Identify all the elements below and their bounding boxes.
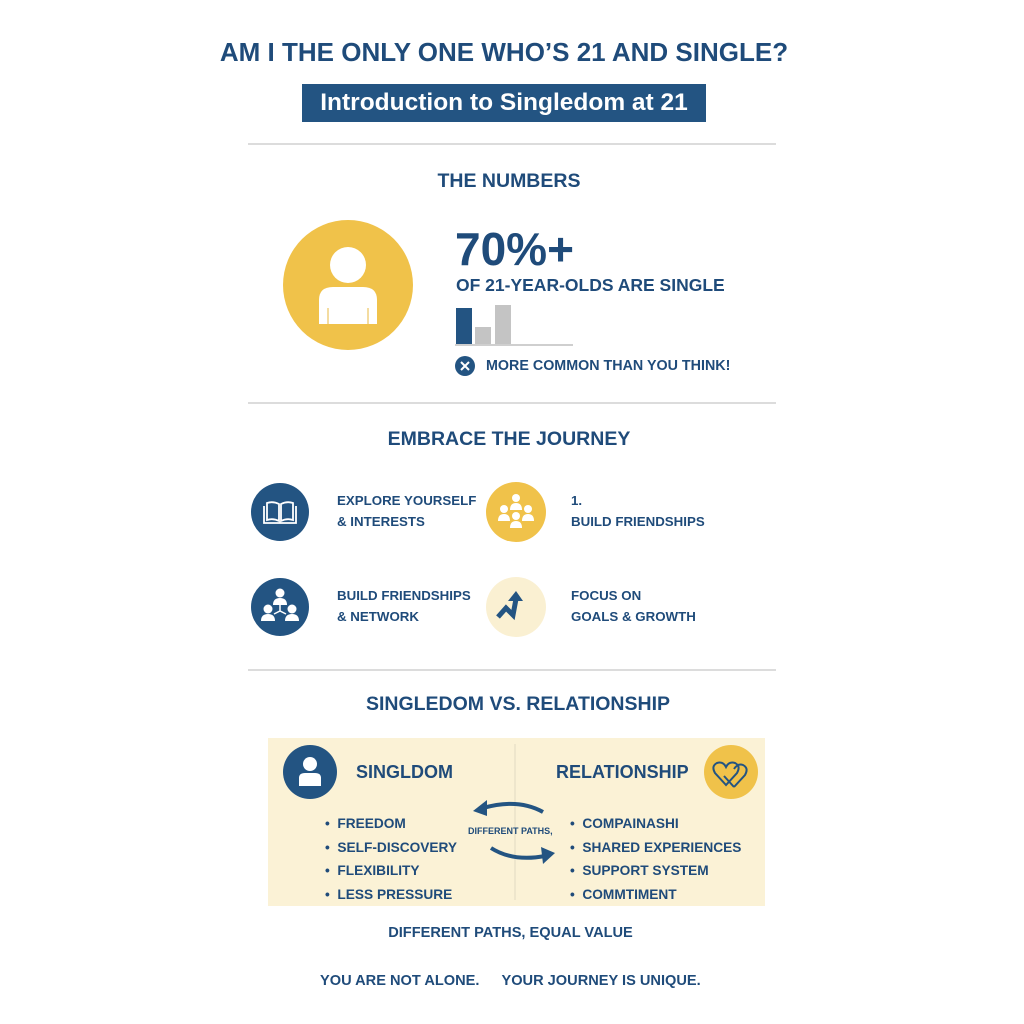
icon: hearts — [704, 745, 758, 799]
text: explore: & INTERESTS — [337, 514, 425, 529]
list: relationship: • COMMTIMENT — [570, 886, 677, 902]
icon: friends group yellow — [486, 482, 546, 542]
list: singledom — [325, 816, 457, 902]
arrows: different paths — [473, 800, 555, 864]
text: build friendships: 1. — [571, 493, 582, 508]
heading: the numbers: THE NUMBERS — [437, 170, 580, 192]
heading: embrace the journey: EMBRACE THE JOURNEY — [388, 428, 630, 450]
tagline: DIFFERENT PATHS, EQUAL VALUE — [388, 925, 633, 941]
closing messages: YOU ARE NOT ALONE. YOUR JOURNEY IS UNIQUE. — [320, 973, 701, 989]
list: singledom: • FLEXIBILITY — [325, 863, 420, 878]
list: relationship: • COMPAINASHI — [570, 816, 679, 831]
callout: more common: MORE COMMON THAN YOU THINK! — [486, 358, 730, 374]
icon: single person — [283, 745, 337, 799]
text: network — [337, 588, 471, 624]
stat: 70%+: 70%+ — [455, 223, 574, 275]
bar chart — [455, 305, 573, 346]
text: explore — [337, 493, 476, 529]
list: relationship — [570, 816, 741, 902]
text: network: & NETWORK — [337, 609, 419, 624]
list: relationship: • SHARED EXPERIENCES — [570, 840, 741, 854]
icon: growth arrow — [486, 577, 546, 637]
text: goals: FOCUS ON — [571, 588, 641, 603]
text: explore: EXPLORE YOURSELF — [337, 493, 476, 508]
text: goals — [571, 588, 696, 624]
subtitle banner: Introduction to Singledom at 21 — [320, 89, 688, 116]
text: build friendships — [571, 493, 705, 529]
text: network: BUILD FRIENDSHIPS — [337, 588, 471, 603]
stat caption: OF 21-YEAR-OLDS ARE SINGLE — [456, 275, 725, 295]
list: singledom: • SELF-DISCOVERY — [325, 840, 457, 854]
list: singledom: • FREEDOM — [325, 816, 406, 831]
icon: person in yellow circle — [283, 220, 413, 350]
text: goals: GOALS & GROWTH — [571, 609, 696, 624]
title: AM I THE ONLY ONE WHO’S 21 AND SINGLE? — [220, 37, 788, 67]
heading: singldom: SINGLDOM — [356, 762, 453, 782]
icon: network — [251, 578, 309, 636]
subtitle banner — [302, 84, 706, 122]
list: singledom: • LESS PRESSURE — [325, 886, 452, 902]
text: build friendships: BUILD FRIENDSHIPS — [571, 514, 705, 529]
heading: relationship: RELATIONSHIP — [556, 762, 689, 782]
panel: comparison — [268, 738, 765, 906]
divider — [514, 744, 516, 900]
label: different paths: DIFFERENT PATHS, — [468, 826, 553, 836]
heading: singledom vs relationship: SINGLEDOM VS. RELATIONSHIP — [366, 693, 670, 715]
icon: book — [251, 483, 309, 541]
list: relationship: • SUPPORT SYSTEM — [570, 863, 709, 878]
